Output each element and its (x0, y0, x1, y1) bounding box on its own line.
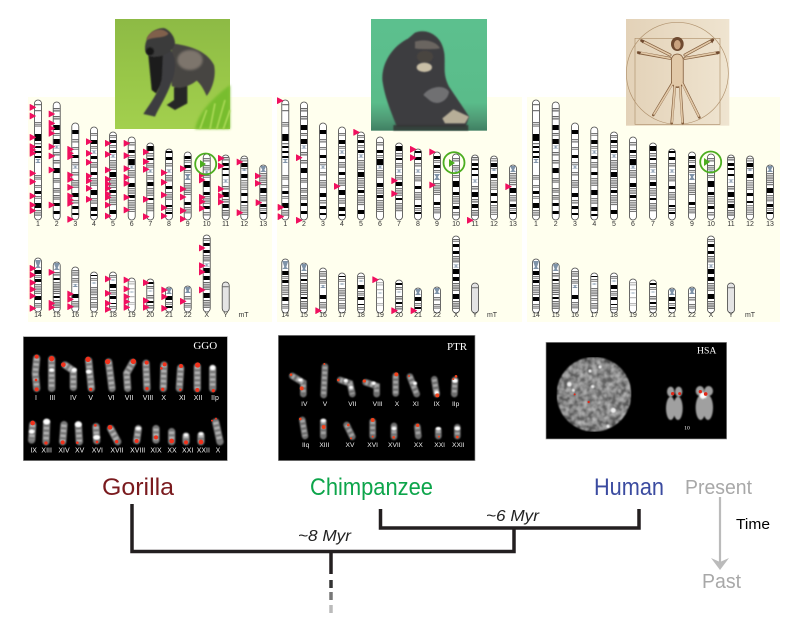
human chromosome numbers: 7 (651, 221, 655, 228)
PTR chromosomes (292, 367, 457, 437)
PTR chromosome labels: XVI (367, 442, 378, 449)
HSA label: HSA (697, 346, 716, 357)
chimpanzee chromosome numbers: 9 (435, 221, 439, 228)
divergence label: 8 Myr: ~8 Myr (298, 528, 352, 545)
human chromosome numbers: 6 (631, 221, 635, 228)
interphase nucleus (557, 357, 631, 432)
human chromosome numbers: 11 (727, 221, 735, 228)
arrow: time direction (711, 497, 729, 570)
PTR chromosome labels: XI (413, 401, 419, 408)
GGO label: GGO (193, 340, 217, 352)
PTR chromosome labels: X (395, 401, 400, 408)
human chromosome numbers: Y (729, 312, 734, 319)
gorilla chromosome numbers (34, 221, 267, 319)
chimpanzee chromosome numbers: 21 (414, 312, 422, 319)
chimpanzee chromosome numbers: 1 (283, 221, 287, 228)
chimpanzee chromosome numbers: 22 (433, 312, 441, 319)
PTR chromosome labels: IV (301, 401, 308, 408)
PTR chromosome labels: XVII (388, 442, 401, 449)
chimpanzee chromosome numbers: 20 (395, 312, 403, 319)
GGO chromosome labels: VII (125, 395, 133, 402)
gorilla chromosome numbers: 18 (109, 312, 117, 319)
GGO chromosome labels: VI (108, 395, 115, 402)
human chromosome numbers: 9 (690, 221, 694, 228)
chimpanzee chromosome ideograms (282, 100, 516, 313)
chimpanzee chromosome numbers: 16 (319, 312, 327, 319)
human chromosome numbers: 14 (532, 312, 540, 319)
chimpanzee chromosome numbers: 14 (281, 312, 289, 319)
human chromosome numbers: 5 (612, 221, 616, 228)
gorilla chromosome numbers: 6 (130, 221, 134, 228)
PTR chromosome labels: XIII (319, 442, 329, 449)
photo: gorilla (115, 19, 230, 129)
photo: chimpanzee (371, 19, 487, 131)
chimpanzee breakpoint markers (277, 98, 511, 314)
human chromosome numbers: 15 (552, 312, 560, 319)
gorilla chromosome numbers: 21 (165, 312, 173, 319)
human chromosome numbers: 12 (746, 221, 754, 228)
chimpanzee chromosome numbers: 13 (509, 221, 517, 228)
chromosome number: 10 (684, 426, 690, 432)
gorilla chromosome numbers: 9 (186, 221, 190, 228)
GGO chromosome labels: XIII (41, 447, 52, 454)
PTR chromosome labels: XXI (434, 442, 445, 449)
panel: HSA FISH image (546, 342, 727, 439)
GGO chromosome labels: III (49, 395, 55, 402)
GGO chromosome labels: I (35, 395, 37, 402)
gorilla breakpoint markers (30, 104, 262, 312)
gorilla chromosome numbers: X (204, 312, 209, 319)
PTR chromosome labels: V (323, 401, 328, 408)
GGO chromosome labels: XVII (110, 447, 124, 454)
chimpanzee chromosome numbers: 7 (397, 221, 401, 228)
GGO chromosome labels: IV (70, 395, 77, 402)
gorilla chromosome numbers: mT (238, 312, 249, 319)
chimpanzee chromosome numbers: 17 (338, 312, 346, 319)
PTR red signals (290, 363, 459, 439)
human chromosome numbers: mT (745, 312, 756, 319)
green circle on chromosome 10 (700, 152, 721, 172)
metaphase chromosome 10 pair (666, 386, 713, 420)
human chromosome numbers: 22 (688, 312, 696, 319)
chimpanzee chromosome numbers: 15 (300, 312, 308, 319)
human chromosome numbers: 2 (554, 221, 558, 228)
GGO chromosome labels: XIV (58, 447, 70, 454)
human chromosome numbers: 21 (668, 312, 676, 319)
gorilla chromosome numbers: Y (223, 312, 228, 319)
gorilla chromosome numbers: 2 (55, 221, 59, 228)
chimpanzee chromosome numbers: 12 (490, 221, 498, 228)
PTR label: PTR (447, 341, 468, 353)
gorilla chromosome numbers: 15 (53, 312, 61, 319)
gorilla chromosome numbers: 5 (111, 221, 115, 228)
gorilla chromosome numbers: 13 (259, 221, 267, 228)
time label: Past: Past (702, 571, 741, 593)
GGO chromosome labels: X (161, 395, 166, 402)
human chromosome numbers: 18 (610, 312, 618, 319)
chimpanzee chromosome numbers (281, 221, 517, 319)
gorilla chromosome ideograms (34, 100, 267, 312)
chimpanzee chromosome numbers: 2 (302, 221, 306, 228)
gorilla chromosome numbers: 10 (203, 221, 211, 228)
GGO chromosome labels (30, 395, 221, 454)
PTR chromosome labels: XV (346, 442, 355, 449)
gorilla chromosome numbers: 8 (167, 221, 171, 228)
GGO chromosome labels: XX (167, 447, 177, 454)
GGO chromosome labels: XI (179, 395, 186, 402)
GGO chromosome labels: XV (75, 447, 85, 454)
human chromosome numbers (532, 221, 774, 319)
chimpanzee chromosome numbers: X (454, 312, 459, 319)
gorilla chromosome numbers: 19 (128, 312, 136, 319)
gorilla chromosome numbers: 4 (92, 221, 96, 228)
panel: gorilla chromosomes (28, 97, 272, 322)
PTR chromosome labels: IX (434, 401, 440, 408)
chimpanzee chromosome numbers: Y (473, 312, 478, 319)
PTR chromosome labels (301, 401, 465, 449)
GGO chromosomes (32, 358, 220, 442)
PTR bright bands (298, 378, 460, 430)
gorilla chromosome numbers: 7 (148, 221, 152, 228)
GGO chromosome labels: VIII (143, 395, 153, 402)
gorilla chromosome numbers: 17 (90, 312, 98, 319)
green circle on chromosome 10 (444, 152, 464, 173)
GGO chromosome labels: IX (30, 447, 37, 454)
GGO chromosome labels: XVI (92, 447, 103, 454)
phylogenetic tree (132, 504, 639, 613)
human chromosome numbers: 19 (629, 312, 637, 319)
chimpanzee chromosome numbers: 19 (376, 312, 384, 319)
GGO chromosome labels: XVIII (130, 447, 145, 454)
human chromosome numbers: 8 (670, 221, 674, 228)
human chromosome numbers: 13 (766, 221, 774, 228)
gorilla chromosome numbers: 22 (184, 312, 192, 319)
chimpanzee chromosome numbers: mT (487, 312, 498, 319)
chimpanzee chromosome numbers: 3 (321, 221, 325, 228)
human chromosome numbers: 10 (707, 221, 715, 228)
GGO chromosome labels: IIp (211, 395, 219, 402)
chimpanzee chromosome numbers: 10 (452, 221, 460, 228)
human chromosome numbers: 4 (592, 221, 596, 228)
panel: GGO karyotype (23, 337, 227, 461)
gorilla chromosome numbers: 16 (71, 312, 79, 319)
GGO chromosome labels: XIX (150, 447, 162, 454)
species label: Chimpanzee: Chimpanzee (310, 474, 433, 501)
time label: Present: Present (685, 477, 752, 499)
divergence label: 6 Myr: ~6 Myr (486, 508, 540, 525)
species label: Gorilla: Gorilla (102, 474, 175, 501)
human chromosome numbers: X (709, 312, 714, 319)
human chromosome ideograms (532, 100, 774, 313)
PTR chromosome labels: IIp (452, 401, 460, 408)
chimpanzee chromosome numbers: 5 (359, 221, 363, 228)
GGO chromosome labels: X (216, 447, 221, 454)
GGO red signals (30, 355, 217, 445)
PTR chromosome labels: XX (414, 442, 423, 449)
gorilla chromosome numbers: 11 (222, 221, 229, 228)
gorilla chromosome numbers: 3 (73, 221, 77, 228)
GGO chromosome labels: XXII (197, 447, 210, 454)
GGO bright bands (29, 365, 215, 440)
chimpanzee chromosome numbers: 18 (357, 312, 365, 319)
gorilla chromosome numbers: 14 (34, 312, 42, 319)
GGO chromosome labels: XXI (182, 447, 193, 454)
PTR chromosome labels: VII (348, 401, 357, 408)
gorilla chromosome numbers: 1 (36, 221, 40, 228)
panel: PTR karyotype (278, 335, 475, 461)
chimpanzee chromosome numbers: 6 (378, 221, 382, 228)
PTR chromosome labels: IIq (302, 442, 310, 449)
PTR chromosome labels: VIII (373, 401, 383, 408)
human chromosome numbers: 16 (571, 312, 579, 319)
panel: chimpanzee chromosomes (277, 97, 522, 322)
human chromosome numbers: 20 (649, 312, 657, 319)
gorilla chromosome numbers: 20 (146, 312, 154, 319)
label: Time: Time (736, 516, 770, 533)
chimpanzee chromosome numbers: 4 (340, 221, 344, 228)
panel: human chromosomes (527, 97, 780, 322)
chimpanzee chromosome numbers: 11 (471, 221, 479, 228)
human chromosome numbers: 1 (534, 221, 538, 228)
human chromosome numbers: 3 (573, 221, 577, 228)
gorilla chromosome numbers: 12 (240, 221, 248, 228)
GGO chromosome labels: XII (194, 395, 202, 402)
GGO chromosome labels: V (88, 395, 93, 402)
species label: Human: Human (594, 474, 664, 501)
chimpanzee chromosome numbers: 8 (416, 221, 420, 228)
human chromosome numbers: 17 (590, 312, 598, 319)
green circle on chromosome 10 (195, 154, 216, 174)
photo: Vitruvian man (626, 19, 729, 126)
PTR chromosome labels: XXII (452, 442, 465, 449)
